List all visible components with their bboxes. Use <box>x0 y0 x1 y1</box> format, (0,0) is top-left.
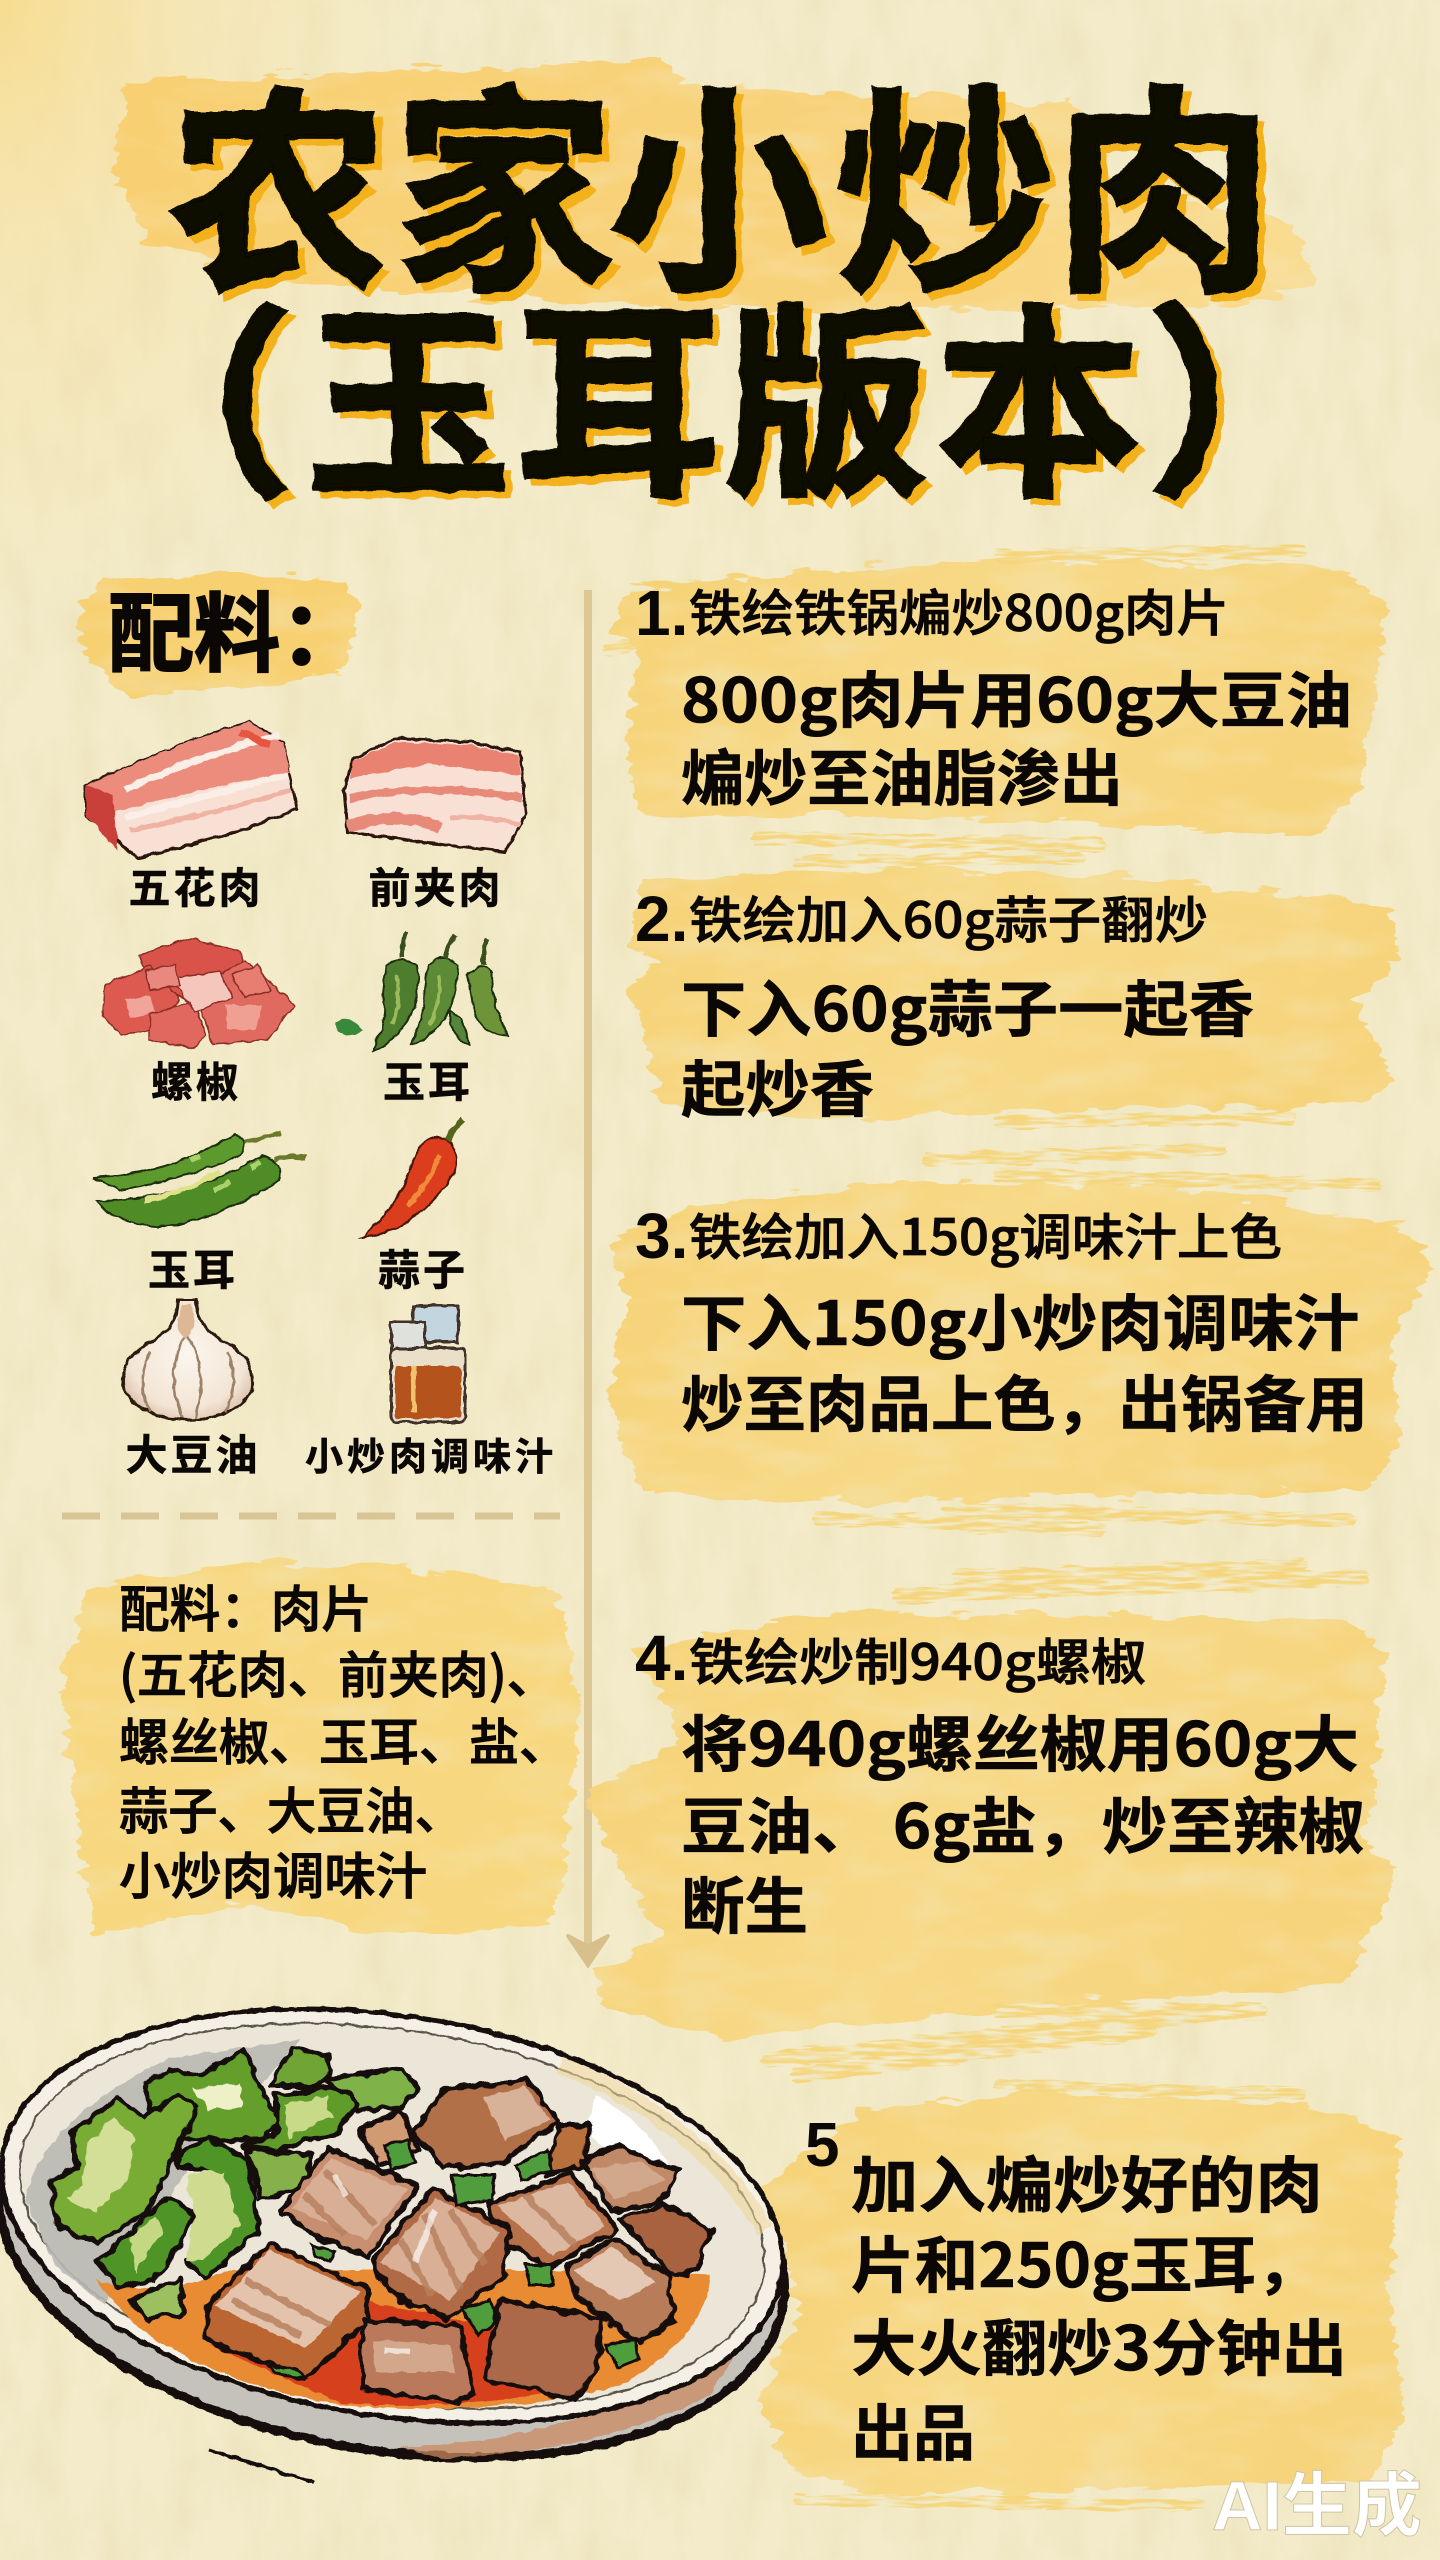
heading wash <box>75 572 358 695</box>
icon: pork belly 2 <box>344 738 526 852</box>
step 1 body: 800g肉片用60g大豆油 <box>681 651 1352 740</box>
panel: ingredient illustrations <box>86 722 526 1422</box>
icon: red chili <box>362 1120 463 1238</box>
step 3 body: 炒至肉品上色，出锅备用 <box>681 1355 1368 1444</box>
step 1 heading: 1. <box>635 577 688 649</box>
step 5 body: 加入煸炒好的肉 <box>851 2136 1323 2225</box>
step 1 body <box>681 651 1352 818</box>
panel: ingredients heading <box>75 564 366 695</box>
icon: green peppers <box>335 932 508 1051</box>
ingredient labels: 五花肉 <box>128 855 264 916</box>
note text: 蒜子、大豆油、 <box>119 1772 464 1844</box>
step 5 body: 片和250g玉耳， <box>851 2216 1320 2305</box>
pork pieces <box>204 2080 712 2402</box>
step 2 body: 起炒香 <box>681 1040 874 1129</box>
icon: garlic <box>123 1300 253 1420</box>
step 3 heading: 3. <box>635 1200 688 1272</box>
step 3 heading: 铁绘加入150g调味汁上色 <box>689 1198 1282 1270</box>
step 1 heading: 铁绘铁锅煸炒800g肉片 <box>689 574 1229 646</box>
step 4 heading: 铁绘炒制940g螺椒 <box>689 1623 1146 1695</box>
step 4 body <box>681 1695 1364 1946</box>
watermark: AI生成 <box>1212 2450 1422 2551</box>
step 4 wash <box>582 1611 1396 2039</box>
icon: sauce jar <box>391 1306 465 1422</box>
note text: 小炒肉调味汁 <box>119 1837 427 1909</box>
plate <box>0 1957 816 2510</box>
ingredient labels: 玉耳 <box>148 1237 238 1298</box>
step 4 body: 断生 <box>681 1857 808 1946</box>
step 2 heading: 铁绘加入60g蒜子翻炒 <box>689 881 1208 953</box>
title line 1: 农家小炒肉 <box>168 18 1274 336</box>
title line 2: （玉耳版本） <box>97 248 1358 545</box>
step 5 body: 大火翻炒3分钟出 <box>851 2299 1347 2388</box>
title line 1: 农家小炒肉 <box>175 25 1281 343</box>
timeline arrow <box>567 590 609 1966</box>
step 2 body: 下入60g蒜子一起香 <box>681 960 1254 1049</box>
title line 2: （玉耳版本） <box>90 241 1351 538</box>
step 3 wash <box>610 1180 1435 1505</box>
icon: long green chilies <box>94 1132 306 1226</box>
step 3 body <box>681 1274 1368 1444</box>
note wash <box>62 1562 578 1935</box>
illustration: plate of stir-fried pork <box>0 1957 816 2510</box>
panel: step 2 <box>625 858 1400 1129</box>
note text: (五花肉、前夹肉)、 <box>119 1636 557 1708</box>
ingredient labels: 蒜子 <box>378 1237 468 1298</box>
step 5 body: 出品 <box>851 2384 975 2473</box>
step 2 wash <box>625 868 1400 1118</box>
note text: 螺丝椒、玉耳、盐、 <box>119 1703 569 1775</box>
step 2 body <box>681 960 1254 1129</box>
panel: step 1 <box>610 552 1390 845</box>
note text <box>119 1570 569 1909</box>
ingredient labels: 前夹肉 <box>368 855 504 916</box>
step 2 heading: 2. <box>635 883 688 955</box>
note text: 配料：肉片 <box>119 1570 372 1642</box>
panel: ingredient list note <box>62 1562 578 1935</box>
panel: step 3 <box>610 1150 1435 1530</box>
panel: step 5 <box>760 2085 1405 2505</box>
step 3 body: 下入150g小炒肉调味汁 <box>681 1274 1359 1363</box>
step 1 body: 煸炒至油脂渗出 <box>681 729 1123 818</box>
heading text: 配料： <box>108 564 366 689</box>
ingredient labels: 小炒肉调味汁 <box>305 1426 557 1481</box>
title wash <box>112 57 1313 312</box>
ingredient labels: 玉耳 <box>383 1049 473 1110</box>
step 5 number: 5 <box>805 2111 839 2180</box>
title <box>90 18 1358 545</box>
step 4 heading: 4. <box>635 1622 688 1694</box>
ingredient labels: 大豆油 <box>125 1422 261 1483</box>
peppers <box>51 2048 418 2318</box>
icon: cubed pork <box>102 938 295 1048</box>
step 1 wash <box>612 558 1390 835</box>
pork highlights <box>215 2086 665 2372</box>
step 5 body <box>851 2136 1347 2473</box>
step 4 body: 豆油、 6g盐，炒至辣椒 <box>681 1777 1364 1866</box>
icon: pork belly 1 <box>86 722 297 858</box>
green onion <box>268 2140 638 2378</box>
panel: step 4 <box>582 1566 1396 2075</box>
ingredient labels <box>125 855 557 1483</box>
step 4 body: 将940g螺丝椒用60g大 <box>681 1695 1359 1784</box>
step 5 wash <box>760 2090 1405 2495</box>
ingredient labels: 螺椒 <box>151 1049 241 1110</box>
sauce <box>95 2270 710 2409</box>
